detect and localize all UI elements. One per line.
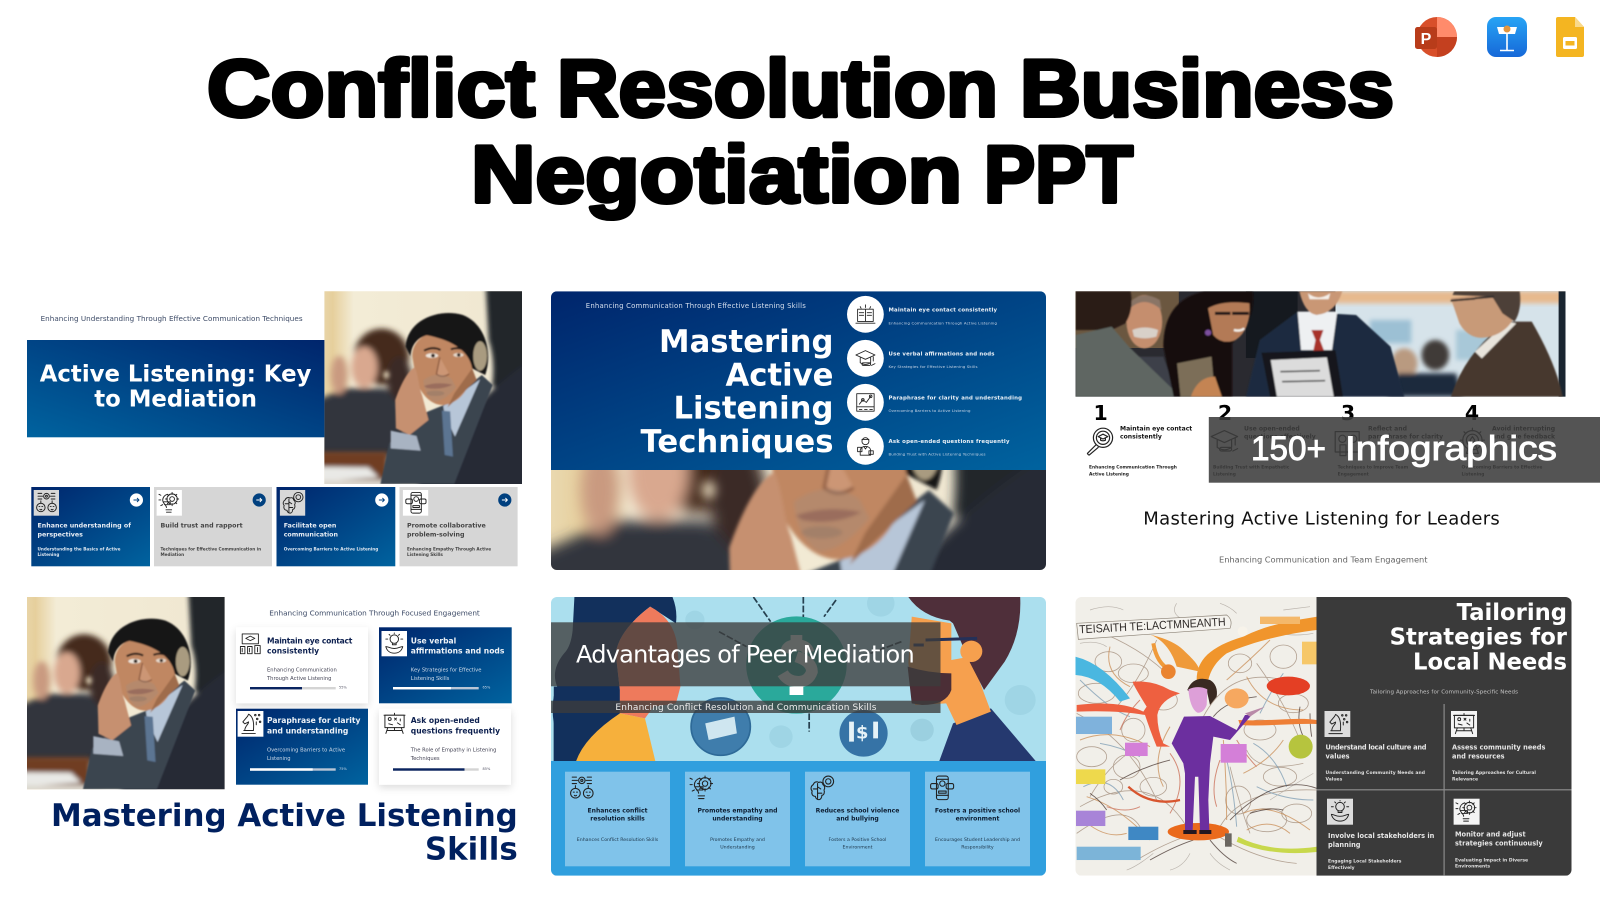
card: collaborative problem solving bbox=[400, 487, 518, 566]
illustration: two people and money: $ bbox=[856, 724, 868, 743]
item: maintain eye contact: Enhancing Communication Through Active Listening bbox=[888, 320, 998, 325]
card: conflict resolution: Enhances conflict bbox=[587, 807, 648, 814]
item: paraphrase bbox=[847, 384, 1022, 421]
card: facilitate communication bbox=[276, 487, 395, 566]
item: verbal affirmations: Key Strategies for Effective Listening Skills bbox=[888, 364, 978, 369]
item: local stakeholders: Effectively bbox=[1328, 865, 1355, 871]
item: local culture: Understand local culture and bbox=[1326, 744, 1427, 752]
panel: advantages of peer mediation bbox=[551, 590, 1046, 876]
item: open-ended questions: Ask open-ended questions frequently bbox=[888, 439, 1010, 445]
step 1: Active Listening bbox=[1089, 472, 1129, 478]
dark content panel: Tailoring Approaches for Community-Specific Needs bbox=[1369, 689, 1518, 695]
card: collaborative problem solving: Promote collaborative bbox=[407, 522, 486, 529]
card: empathy bbox=[685, 772, 790, 866]
heading: Mastering Active Listening bbox=[51, 798, 518, 834]
item: community needs: Assess community needs bbox=[1452, 744, 1546, 752]
panel: mastering active listening skills bbox=[0, 582, 518, 867]
blue header: Techniques bbox=[641, 425, 834, 460]
title banner: to Mediation bbox=[94, 387, 257, 413]
step 2: Building Trust with Empathetic bbox=[1213, 465, 1290, 471]
step 3: paraphrase for clarity bbox=[1368, 434, 1443, 441]
step 1 bbox=[1087, 401, 1192, 478]
subtitle band: Enhancing Conflict Resolution and Communication Skills bbox=[615, 703, 877, 713]
item: community needs: and resources bbox=[1452, 753, 1505, 761]
step 2 bbox=[1211, 401, 1316, 478]
card: school violence: Reduces school violence bbox=[816, 808, 899, 815]
blue header: Mastering bbox=[659, 325, 834, 360]
card: build trust: Build trust and rapport bbox=[160, 522, 243, 529]
card: conflict resolution: resolution skills bbox=[590, 815, 645, 822]
title: Conflict bbox=[207, 44, 535, 134]
badge: 150+ infographics: Infographics bbox=[1345, 430, 1557, 468]
card: build trust: Techniques for Effective Communication in bbox=[160, 546, 261, 551]
card: maintain eye contact: Maintain eye contact bbox=[267, 636, 353, 645]
item: local stakeholders: Engaging Local Stakeholders bbox=[1328, 859, 1402, 865]
step 4: 4 bbox=[1465, 401, 1479, 425]
panel: active listening key to mediation bbox=[27, 277, 564, 566]
icon: Keynote bbox=[1487, 17, 1527, 57]
illustration: two people and money bbox=[551, 597, 1046, 761]
icon: PowerPoint bbox=[1415, 17, 1457, 57]
card: build trust: Mediation bbox=[160, 552, 184, 557]
card: maintain eye contact: 55% bbox=[339, 686, 347, 690]
card: school violence: Environment bbox=[843, 844, 873, 850]
card: empathy: Understanding bbox=[720, 844, 755, 850]
icon: PowerPoint: P bbox=[1421, 31, 1432, 48]
card: conflict resolution: Enhances Conflict Resolution Skills bbox=[577, 837, 659, 843]
step 2: Use open-ended bbox=[1244, 426, 1300, 433]
step 1: consistently bbox=[1120, 434, 1162, 441]
card: open-ended questions: Techniques bbox=[410, 756, 440, 762]
card: verbal affirmations: Key Strategies for Effective bbox=[411, 668, 481, 674]
badge: 150+ infographics: 150+ bbox=[1251, 430, 1326, 468]
heading: Skills bbox=[425, 831, 518, 867]
card: school violence: and bullying bbox=[836, 816, 879, 823]
item: local culture bbox=[1324, 711, 1427, 782]
card: maintain eye contact bbox=[236, 627, 368, 703]
card: maintain eye contact: consistently bbox=[267, 647, 319, 656]
step 4: Avoid interrupting bbox=[1492, 426, 1555, 433]
item: local culture: Values bbox=[1326, 776, 1343, 782]
item: local stakeholders bbox=[1327, 799, 1435, 871]
illustration: mind map: TEISAITH TE:LACTMNEANTH bbox=[1079, 616, 1226, 636]
blue header bbox=[551, 291, 1046, 470]
card: school violence bbox=[805, 772, 910, 866]
item: community needs: Relevance bbox=[1452, 776, 1478, 782]
item: paraphrase: Paraphrase for clarity and understanding bbox=[888, 395, 1022, 401]
card: positive environment bbox=[925, 772, 1030, 866]
card: paraphrase: Listening bbox=[267, 756, 291, 762]
card: positive environment: Responsibility bbox=[961, 844, 994, 850]
card: empathy: understanding bbox=[712, 815, 763, 822]
card: open-ended questions bbox=[379, 709, 511, 785]
photo: man listening bbox=[27, 597, 225, 790]
card: verbal affirmations bbox=[379, 627, 512, 703]
title banner bbox=[27, 340, 324, 437]
item: open-ended questions bbox=[847, 428, 1010, 465]
item: monitor and adjust: Monitor and adjust bbox=[1455, 831, 1526, 839]
photo: close-up face bbox=[551, 470, 1046, 570]
card: build trust bbox=[154, 487, 272, 566]
item: community needs bbox=[1451, 711, 1546, 782]
item: community needs: Tailoring Approaches for Cultural bbox=[1452, 770, 1536, 776]
card: enhance understanding bbox=[31, 487, 150, 566]
title: Business bbox=[1020, 44, 1394, 134]
subtitle: Enhancing Communication Through Focused Engagement bbox=[269, 608, 480, 617]
step 3: 3 bbox=[1341, 401, 1355, 425]
card: positive environment: Encourages Student Leadership and bbox=[935, 837, 1020, 843]
panel: tailoring strategies bbox=[1075, 597, 1572, 876]
step 3: Reflect and bbox=[1368, 426, 1407, 433]
panel: mastering active listening techniques bbox=[551, 291, 1046, 570]
subtitle band bbox=[551, 701, 940, 713]
card: conflict resolution bbox=[565, 772, 670, 866]
card: facilitate communication: communication bbox=[284, 531, 338, 538]
dark content panel bbox=[1316, 597, 1572, 876]
item: maintain eye contact bbox=[847, 296, 998, 333]
card: enhance understanding: Understanding the Basics of Active bbox=[38, 546, 121, 551]
title band: Advantages of Peer Mediation bbox=[576, 641, 915, 669]
item: monitor and adjust: Evaluating Impact in Diverse bbox=[1455, 857, 1528, 863]
item: maintain eye contact: Maintain eye contact consistently bbox=[888, 308, 997, 314]
card: open-ended questions: questions frequently bbox=[411, 727, 500, 736]
photo: man listening bbox=[324, 291, 522, 484]
title band bbox=[551, 622, 940, 686]
dark content panel: Strategies for bbox=[1390, 625, 1568, 651]
card: paraphrase: Overcoming Barriers to Active bbox=[267, 748, 345, 754]
card: maintain eye contact: Through Active Listening bbox=[266, 676, 331, 682]
step 3: Engagement bbox=[1338, 472, 1369, 478]
item: open-ended questions: Building Trust with Active Listening Techniques bbox=[888, 452, 986, 457]
blue header: Listening bbox=[673, 392, 834, 427]
card: maintain eye contact: Enhancing Communication bbox=[267, 668, 337, 674]
step 1: Maintain eye contact bbox=[1120, 426, 1192, 433]
software icons bbox=[1415, 17, 1584, 57]
dark content panel: Tailoring bbox=[1457, 600, 1567, 626]
subtitle: Enhancing Understanding Through Effective Communication Techniques bbox=[41, 314, 303, 323]
title bbox=[207, 44, 1394, 220]
card: enhance understanding: Listening bbox=[38, 552, 59, 557]
card: open-ended questions: Ask open-ended bbox=[411, 716, 480, 725]
item: paraphrase: Overcoming Barriers to Active Listening bbox=[888, 408, 971, 413]
step 3: Techniques to Improve Team bbox=[1338, 465, 1409, 471]
card: collaborative problem solving: Listening Skills bbox=[407, 552, 443, 557]
item: monitor and adjust: strategies continuously bbox=[1455, 840, 1543, 848]
step 2: questions effectively bbox=[1244, 434, 1316, 441]
title banner: Active Listening: Key bbox=[40, 362, 312, 388]
badge: 150+ infographics bbox=[1209, 417, 1600, 483]
item: local culture: Understanding Community Needs and bbox=[1326, 770, 1425, 776]
blue header: Enhancing Communication Through Effective Listening Skills bbox=[586, 302, 806, 310]
dark content panel: Local Needs bbox=[1413, 649, 1567, 675]
card: paraphrase: Paraphrase for clarity bbox=[267, 716, 360, 725]
item: local stakeholders: Involve local stakeholders in bbox=[1328, 832, 1435, 840]
card: open-ended questions: 85% bbox=[482, 767, 491, 771]
blue header: Active bbox=[726, 358, 834, 393]
step 3 bbox=[1335, 401, 1443, 478]
card: paraphrase: and understanding bbox=[267, 727, 348, 736]
steps bbox=[1087, 401, 1556, 478]
card: verbal affirmations: Use verbal bbox=[411, 636, 456, 645]
step 4: Overcoming Barriers to Effective bbox=[1462, 465, 1542, 471]
item: local stakeholders: planning bbox=[1328, 841, 1361, 849]
card: verbal affirmations: 65% bbox=[482, 686, 491, 690]
heading: Mastering Active Listening for Leaders bbox=[1143, 508, 1500, 530]
item: verbal affirmations: Use verbal affirmations and nods bbox=[888, 351, 994, 357]
step 4: and give feedback bbox=[1492, 434, 1556, 441]
card: positive environment: environment bbox=[956, 816, 999, 823]
step 1: 1 bbox=[1093, 401, 1108, 425]
item: monitor and adjust: Environments bbox=[1455, 864, 1490, 870]
card: empathy: Promotes Empathy and bbox=[710, 837, 765, 843]
card: collaborative problem solving: problem-solving bbox=[407, 531, 465, 538]
title: Negotiation bbox=[471, 130, 962, 220]
card: facilitate communication: Facilitate open bbox=[284, 522, 336, 529]
title: PPT bbox=[984, 130, 1133, 220]
card: school violence: Fosters a Positive School bbox=[829, 837, 886, 843]
step 4 bbox=[1460, 401, 1556, 478]
heading bbox=[51, 798, 518, 867]
card: positive environment: Fosters a positive school bbox=[935, 808, 1020, 815]
title: Resolution bbox=[557, 44, 998, 134]
illustration: mind map bbox=[1076, 597, 1316, 876]
panel: mastering active listening for leaders bbox=[1076, 291, 1566, 564]
card: empathy: Promotes empathy and bbox=[697, 807, 778, 814]
card: facilitate communication: Overcoming Barriers to Active Listening bbox=[284, 546, 378, 551]
item: verbal affirmations bbox=[847, 340, 994, 377]
card: verbal affirmations: Listening Skills bbox=[411, 676, 450, 682]
item: local culture: values bbox=[1326, 753, 1350, 761]
subheading: Enhancing Communication and Team Engagement bbox=[1219, 554, 1428, 564]
item: monitor and adjust bbox=[1454, 799, 1543, 870]
photo: award ceremony bbox=[1076, 291, 1566, 397]
step 4: Listening bbox=[1462, 472, 1484, 478]
card: enhance understanding: perspectives bbox=[38, 531, 83, 538]
step 2: Listening bbox=[1213, 472, 1236, 478]
card: open-ended questions: The Role of Empathy in Listening bbox=[410, 748, 496, 754]
card: collaborative problem solving: Enhancing Empathy Through Active bbox=[407, 546, 491, 551]
blue lower section bbox=[551, 761, 1046, 876]
step 2: 2 bbox=[1218, 401, 1232, 425]
card: paraphrase: 75% bbox=[339, 767, 347, 771]
card: paraphrase bbox=[236, 709, 368, 785]
card: enhance understanding: Enhance understanding of bbox=[38, 522, 131, 529]
step 1: Enhancing Communication Through bbox=[1089, 465, 1177, 471]
card: verbal affirmations: affirmations and nods bbox=[411, 647, 505, 656]
icon: Google Slides bbox=[1556, 17, 1584, 57]
